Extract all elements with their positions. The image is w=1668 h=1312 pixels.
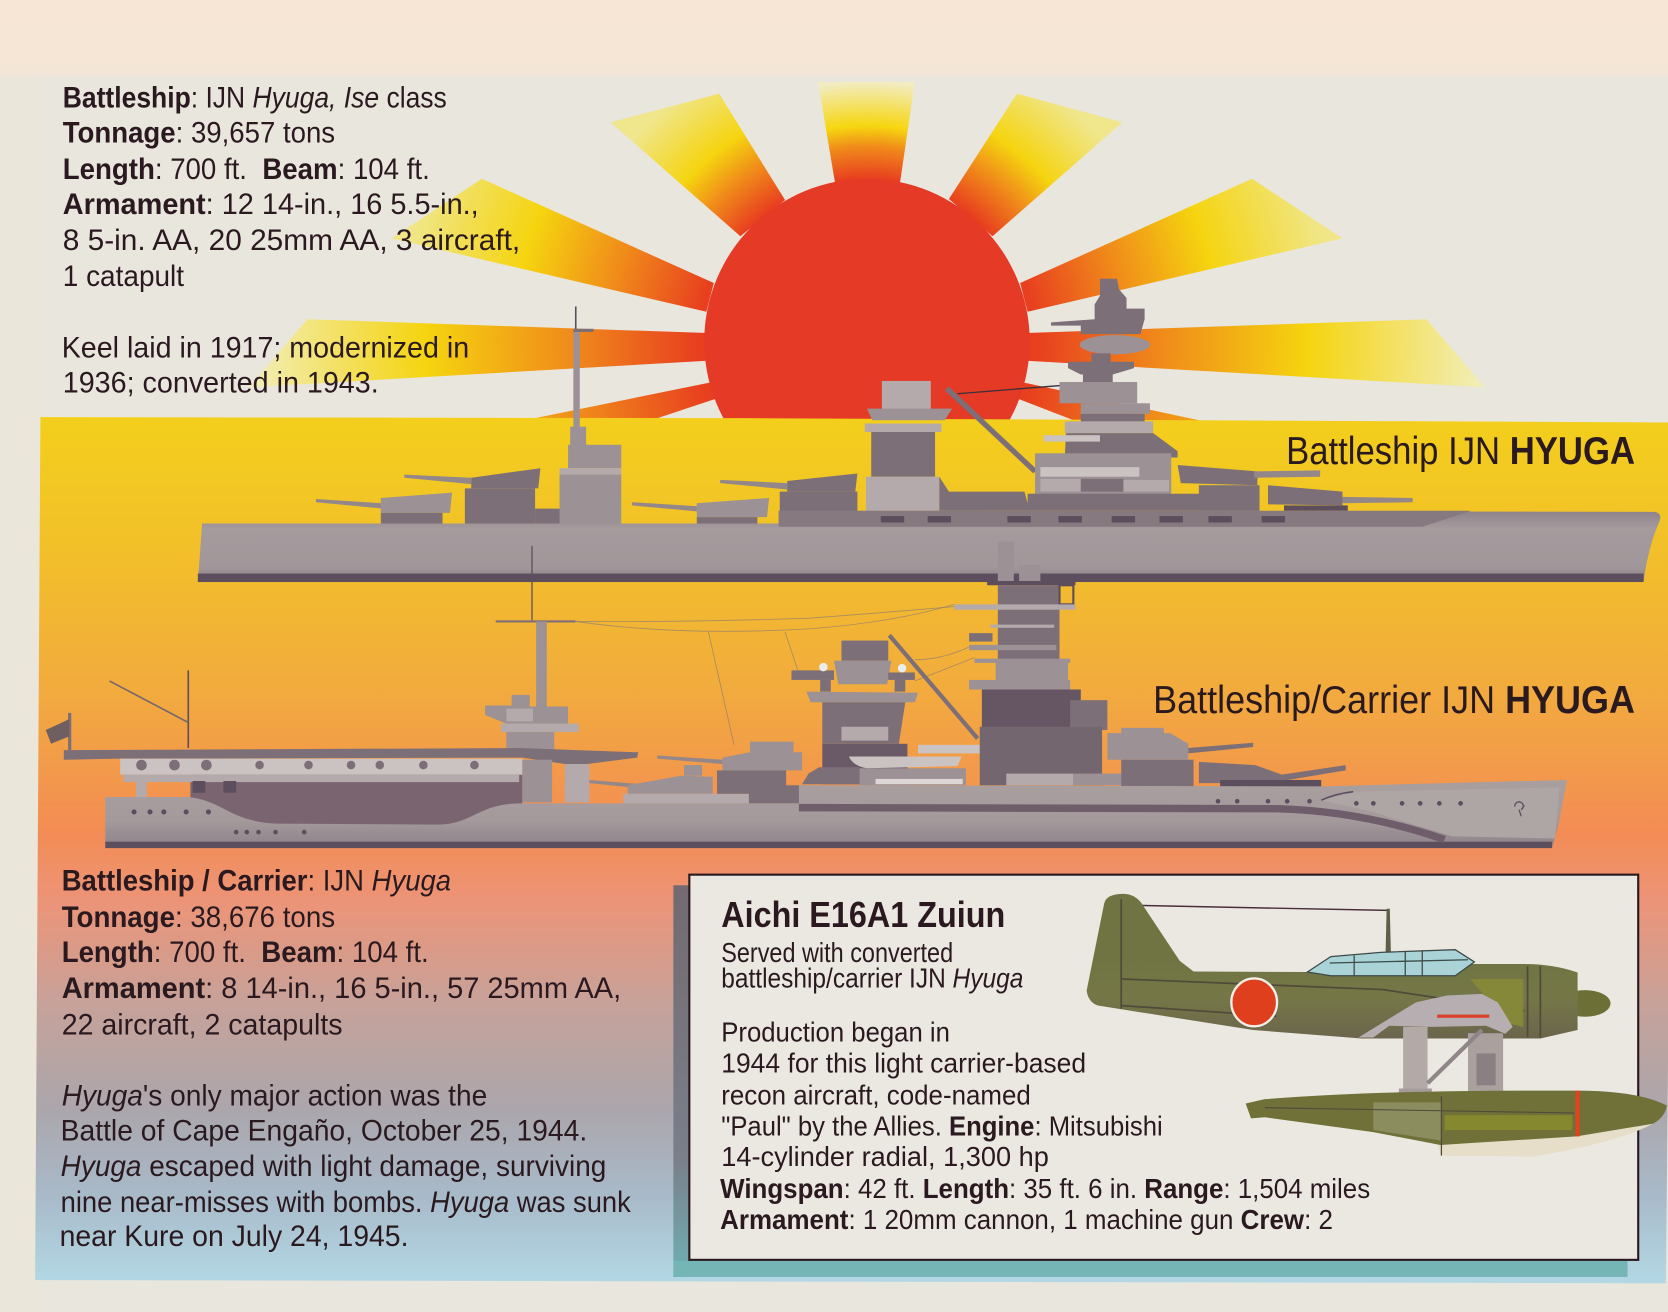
background gradient panel <box>35 417 1668 1283</box>
canopy frames <box>1330 950 1468 976</box>
propeller spinner <box>1559 990 1611 1017</box>
specification text: battleship/carrier: Length: 700 ft. Beam: 104 ft. <box>62 936 429 969</box>
aircraft description text: recon aircraft, code-named <box>721 1080 1031 1111</box>
float red band <box>1575 1091 1580 1136</box>
specification text: battleship: 1936; converted in 1943. <box>63 367 379 400</box>
catapult crane <box>889 635 978 738</box>
specification text: battleship/carrier: Armament: 8 14-in., 16 5-in., 57 25mm AA, <box>62 972 621 1005</box>
specification text: battleship <box>62 81 520 400</box>
upper deck strake <box>779 511 1471 527</box>
aircraft description text: "Paul" by the Allies. Engine: Mitsubishi <box>721 1110 1163 1141</box>
aircraft description text: Wingspan: 42 ft. Length: 35 ft. 6 in. Range: 1,504 miles <box>720 1173 1370 1204</box>
midship tower with searchlights <box>791 641 918 784</box>
midship turrets <box>632 474 857 525</box>
hangar and flight deck <box>64 748 638 826</box>
hull <box>198 511 1660 582</box>
antenna <box>1142 906 1391 976</box>
canopy <box>1307 950 1474 976</box>
specification text: battleship: Tonnage: 39,657 tons <box>63 117 335 150</box>
float underside <box>1437 1124 1653 1157</box>
float panels <box>1265 1096 1574 1156</box>
specification text: battleship: 1 catapult <box>63 260 185 293</box>
specification text: battleship: Length: 700 ft. Beam: 104 ft. <box>63 153 430 186</box>
sheer line <box>1321 792 1353 800</box>
aircraft: Aichi E16A1 floatplane <box>1087 894 1667 1157</box>
forward turrets <box>1028 465 1413 511</box>
casemate ports <box>881 516 1285 522</box>
rigging wires <box>576 604 974 745</box>
specification text: battleship/carrier: near Kure on July 24, 1945. <box>60 1220 408 1253</box>
ship: battleship Hyuga profile <box>198 279 1660 582</box>
pagoda bridge tower <box>954 542 1153 785</box>
specification text: battleship/carrier: Tonnage: 38,676 tons <box>62 901 335 934</box>
specification text: battleship: Battleship: IJN Hyuga, Ise class <box>63 81 447 114</box>
specification text: battleship/carrier <box>60 865 631 1253</box>
aircraft description text: 14-cylinder radial, 1,300 hp <box>721 1141 1049 1172</box>
mast <box>573 306 594 428</box>
wing <box>1358 994 1513 1037</box>
aft turrets <box>316 468 561 525</box>
aircraft description text: battleship/carrier IJN Hyuga <box>721 962 1023 993</box>
specification text: battleship/carrier: Hyuga escaped with light damage, surviving <box>61 1150 606 1183</box>
aft mast and island <box>485 546 579 751</box>
funnel tower <box>865 381 1030 511</box>
fuselage <box>1087 894 1578 1039</box>
specification text: battleship: Armament: 12 14-in., 16 5.5-in., <box>63 188 479 221</box>
bow highlight <box>1321 787 1559 838</box>
hull <box>105 780 1567 848</box>
specification text: battleship/carrier: nine near-misses with bombs. Hyuga was sunk <box>61 1186 631 1219</box>
hinomaru roundel <box>1231 978 1277 1026</box>
sun disc <box>704 179 1030 504</box>
float <box>1246 1091 1667 1145</box>
aircraft description text: 1944 for this light carrier-based <box>721 1048 1086 1079</box>
ship: battleship/carrier Hyuga profile <box>46 542 1567 848</box>
panel: aircraft box <box>689 875 1638 1260</box>
forward turrets <box>1107 728 1346 787</box>
aircraft description text <box>720 894 1370 1235</box>
portholes <box>131 799 1463 834</box>
bridge tower <box>1035 279 1178 496</box>
aircraft description text: Armament: 1 20mm cannon, 1 machine gun Crew: 2 <box>720 1204 1333 1235</box>
label: battleship: Battleship IJN HYUGA <box>1286 429 1635 473</box>
aft turrets <box>589 742 802 803</box>
specification text: battleship: 8 5-in. AA, 20 25mm AA, 3 aircraft, <box>63 224 520 257</box>
aircraft description text: Production began in <box>721 1017 950 1048</box>
specification text: battleship: Keel laid in 1917; modernized in <box>62 332 469 365</box>
waterline band <box>105 842 1552 848</box>
specification text: battleship/carrier: Battleship / Carrier: IJN Hyuga <box>62 865 451 898</box>
catapult crane <box>947 385 1065 471</box>
specification text: battleship/carrier: Hyuga's only major action was the <box>62 1080 487 1113</box>
hull waterline band <box>198 574 1644 582</box>
bow emblem <box>1515 802 1524 816</box>
box drop shadow <box>673 885 1628 1277</box>
float struts <box>1399 1027 1503 1095</box>
aft tower <box>560 427 621 524</box>
label: battleship/carrier: Battleship/Carrier IJN HYUGA <box>1153 678 1635 722</box>
specification text: battleship/carrier: 22 aircraft, 2 catapults <box>62 1008 343 1041</box>
cowling highlight <box>1470 979 1523 1027</box>
hull armour stripe <box>799 808 1445 840</box>
aircraft description text: Aichi E16A1 Zuiun <box>721 894 1005 935</box>
fuselage panel lines <box>1121 899 1540 1037</box>
specification text: battleship/carrier: Battle of Cape Engaño, October 25, 1944. <box>61 1115 587 1148</box>
stern flag <box>46 713 71 750</box>
aircraft description text: Served with converted <box>721 937 953 968</box>
ship boats <box>849 745 995 785</box>
rising sun rays <box>249 82 1485 421</box>
stern antenna <box>110 670 188 748</box>
wing red stripe <box>1437 1015 1489 1018</box>
